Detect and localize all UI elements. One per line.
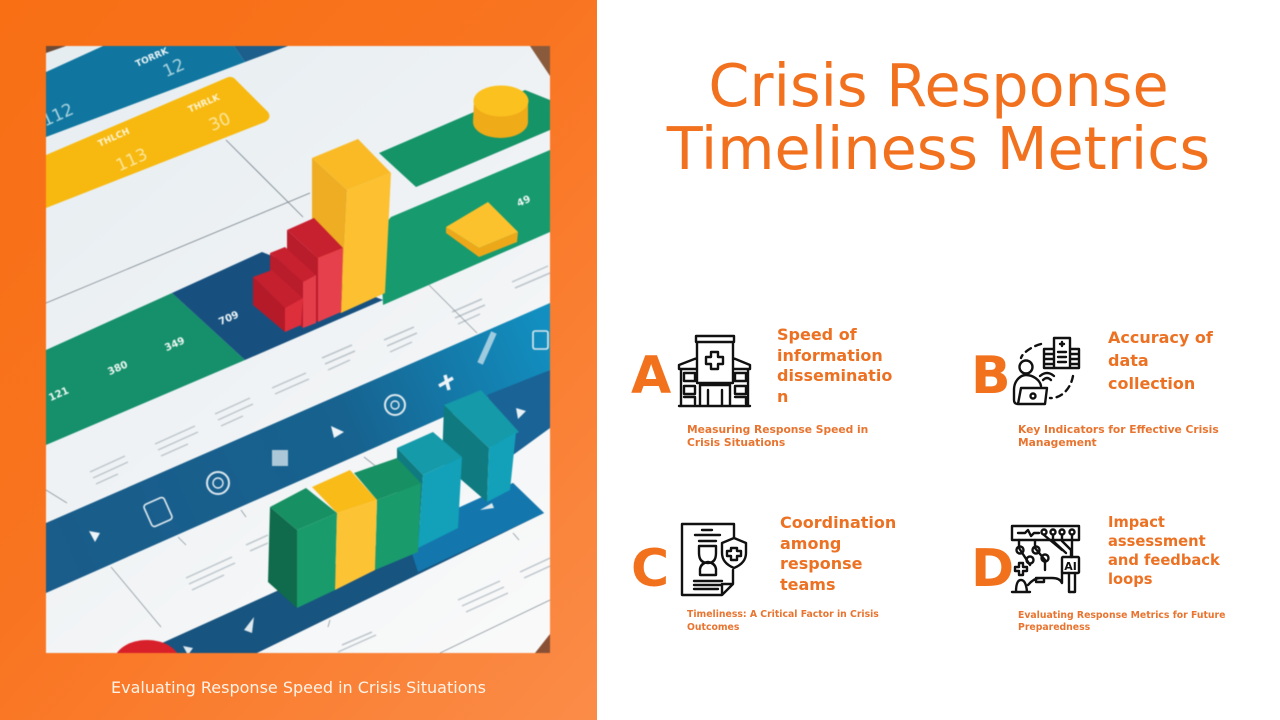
heading: n (777, 386, 788, 406)
description: Measuring Response Speed in (687, 423, 868, 436)
description (687, 609, 879, 632)
title: Crisis Response (708, 51, 1169, 120)
metric A (631, 325, 892, 449)
top blue band: 12 (160, 55, 188, 82)
icon: AI circuit board (1010, 524, 1080, 594)
heading (1108, 328, 1213, 393)
heading: collection (1108, 374, 1195, 393)
yellow band: 30 (206, 109, 234, 136)
yellow band: THRLK (187, 92, 222, 116)
title (666, 51, 1210, 183)
green, yellow and teal block chart (268, 390, 519, 608)
green bands: 349 (163, 335, 187, 354)
green bands: 121 (47, 385, 71, 404)
heading: teams (780, 574, 836, 594)
caption: Evaluating Response Speed in Crisis Situations (111, 678, 486, 697)
description: Management (1018, 436, 1097, 449)
lower dark blue band (114, 370, 550, 684)
AI label: AI (1064, 560, 1077, 573)
heading (1108, 514, 1220, 588)
description: Evaluating Response Metrics for Future (1018, 610, 1225, 620)
heading (780, 513, 896, 594)
title: Timeliness Metrics (667, 114, 1210, 183)
letter C: C (631, 539, 669, 599)
top blue band: TORRK (134, 46, 171, 70)
yellow cylinder and square (446, 86, 528, 257)
heading: Speed of (777, 325, 857, 344)
icon band (46, 303, 550, 593)
metric B (971, 328, 1219, 449)
top blue band (39, 46, 288, 137)
description (1018, 610, 1225, 633)
heading: assessment (1108, 533, 1206, 550)
letter B: B (971, 346, 1011, 406)
letter D: D (971, 539, 1014, 599)
description: Key Indicators for Effective Crisis (1018, 423, 1219, 436)
panel: orange image panel (0, 0, 597, 720)
description: Timeliness: A Critical Factor in Crisis (687, 609, 879, 620)
heading (777, 325, 892, 406)
heading: data (1108, 351, 1149, 370)
yellow tall bar (312, 139, 391, 313)
dark blue band under red bars (172, 252, 383, 360)
yellow band (46, 77, 269, 208)
metric D (971, 514, 1225, 633)
icon: remote worker and hospital (1012, 336, 1080, 406)
dark blue band under red bars: 709 (217, 309, 241, 328)
icon: medical document with shield (680, 522, 748, 596)
red stair bars (253, 218, 343, 332)
green bands: 380 (106, 359, 130, 378)
green bands (46, 90, 550, 445)
description: Crisis Situations (687, 436, 785, 449)
description: Preparedness (1018, 622, 1090, 633)
heading: Coordination (780, 513, 896, 532)
icon: hospital building (678, 334, 752, 408)
description: Outcomes (687, 622, 739, 632)
heading: and feedback (1108, 552, 1220, 569)
heading: disseminatio (777, 366, 892, 385)
description (1018, 423, 1219, 449)
heading: loops (1108, 571, 1152, 588)
heading: information (777, 346, 883, 364)
green bands: 49 (515, 194, 533, 210)
heading: among (780, 534, 841, 552)
heading: Impact (1108, 514, 1165, 531)
heading: response (780, 554, 862, 573)
faint text blocks on poster (90, 266, 550, 652)
metric C (631, 513, 896, 632)
image: 3D bar chart on timeline poster (45, 45, 551, 654)
description (687, 423, 868, 449)
yellow band: THLCH (97, 127, 132, 150)
letter A: A (631, 346, 671, 406)
yellow band: 113 (113, 145, 151, 176)
heading: Accuracy of (1108, 328, 1213, 347)
